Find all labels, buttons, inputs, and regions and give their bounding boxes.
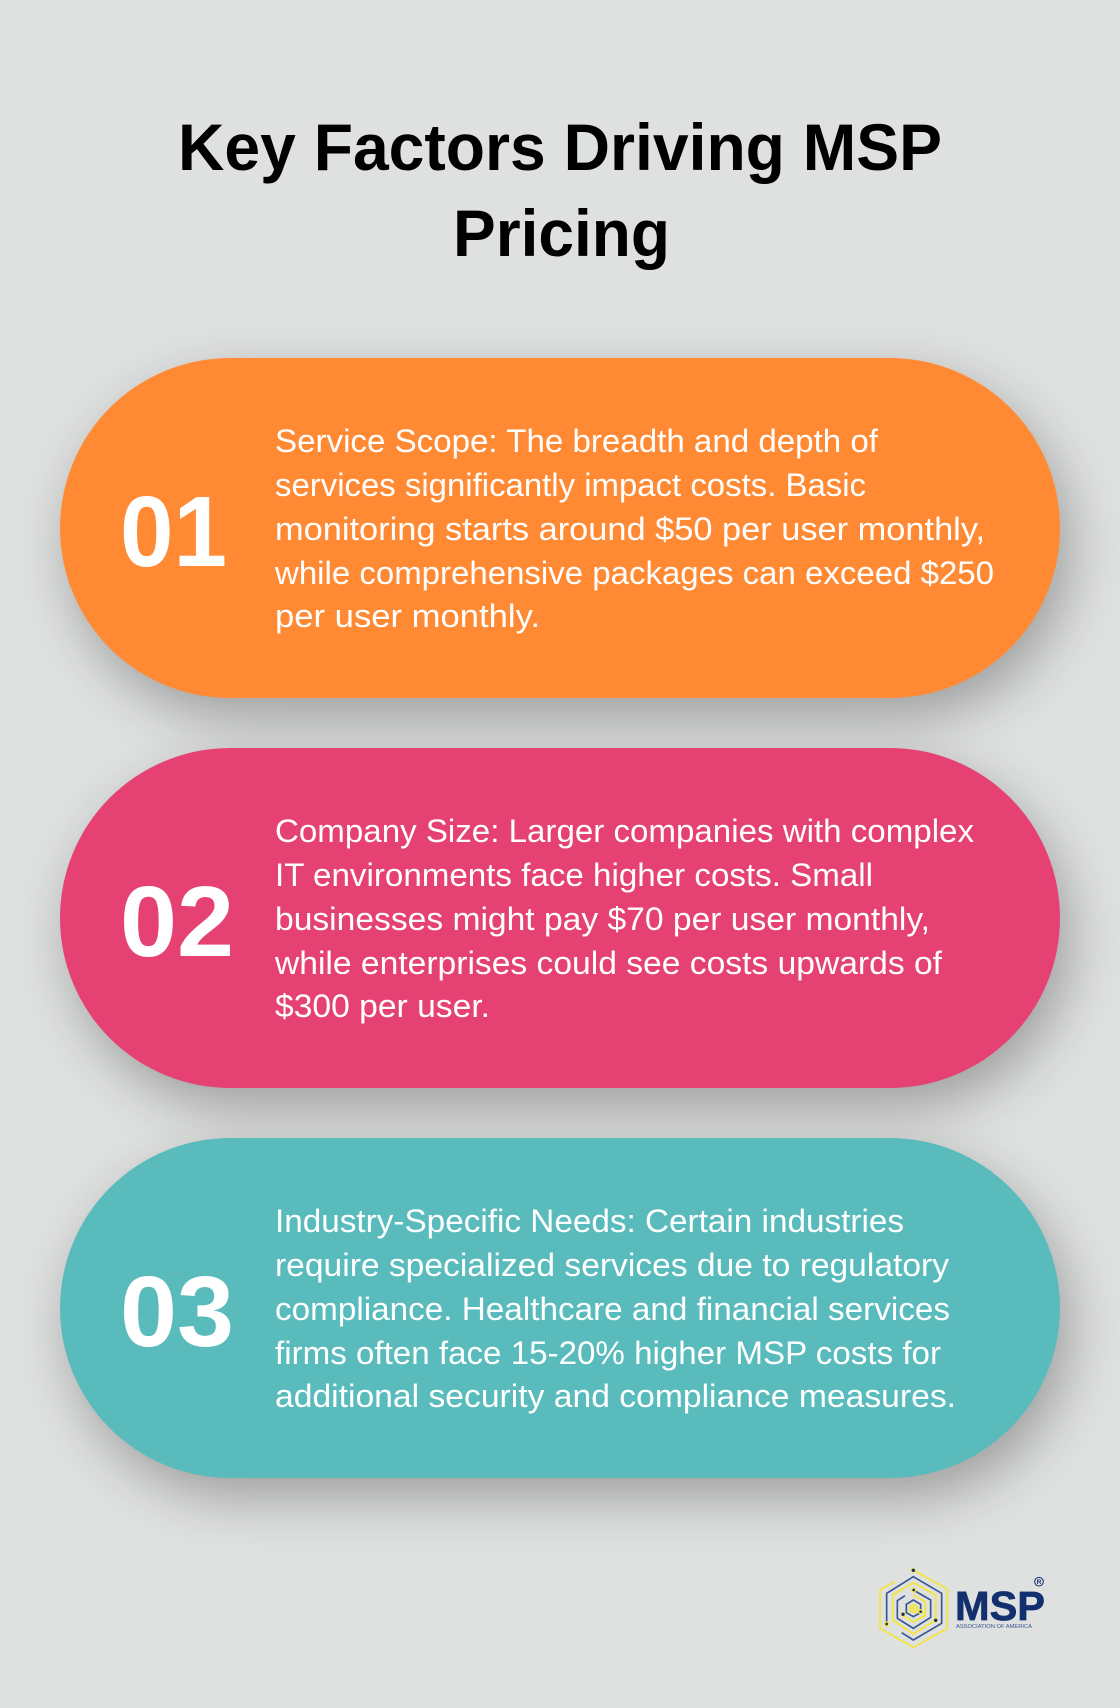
- logo tagline: ASSOCIATION OF AMERICA: [956, 1624, 1032, 1630]
- company size text: $300 per user.: [275, 988, 490, 1024]
- company size text: Company Size: Larger companies with complex: [275, 813, 974, 849]
- panel: industry-specific needs: [60, 1138, 1060, 1478]
- registered mark: R: [1037, 1579, 1042, 1586]
- panel: service scope: [60, 358, 1060, 698]
- title: [178, 110, 942, 270]
- number 02: 02: [120, 866, 234, 978]
- company size text: businesses might pay $70 per user monthly,: [275, 901, 930, 937]
- logo wordmark MSP: MSP: [955, 1583, 1045, 1629]
- industry-specific needs text: compliance. Healthcare and financial services: [275, 1291, 950, 1327]
- logo: MSP Association of America: [880, 1568, 1045, 1647]
- company size text: [274, 813, 974, 1024]
- industry-specific needs text: firms often face 15-20% higher MSP costs for: [275, 1335, 941, 1371]
- service scope text: monitoring starts around $50 per user monthly,: [275, 511, 985, 547]
- pink pill background: [60, 748, 1060, 1088]
- company size text: while enterprises could see costs upwards of: [274, 945, 942, 981]
- industry-specific needs text: Industry-Specific Needs: Certain industries: [275, 1203, 904, 1239]
- title: Pricing: [453, 196, 670, 270]
- service scope text: services significantly impact costs. Basic: [275, 467, 866, 503]
- registered mark: [1035, 1577, 1043, 1586]
- company size text: IT environments face higher costs. Small: [275, 857, 873, 893]
- number 03: 03: [120, 1256, 234, 1368]
- panel: company size: [60, 748, 1060, 1088]
- industry-specific needs text: [275, 1203, 956, 1414]
- industry-specific needs text: additional security and compliance measures.: [275, 1378, 956, 1414]
- title: Key Factors Driving MSP: [178, 110, 942, 184]
- orange pill background: [60, 358, 1060, 698]
- number 01: 01: [120, 476, 227, 588]
- service scope text: while comprehensive packages can exceed $250: [274, 555, 994, 591]
- industry-specific needs text: require specialized services due to regulatory: [275, 1247, 949, 1283]
- service scope text: [274, 423, 994, 634]
- icon: hexagon network: [880, 1568, 947, 1647]
- service scope text: Service Scope: The breadth and depth of: [275, 423, 878, 459]
- service scope text: per user monthly.: [275, 598, 540, 634]
- teal pill background: [60, 1138, 1060, 1478]
